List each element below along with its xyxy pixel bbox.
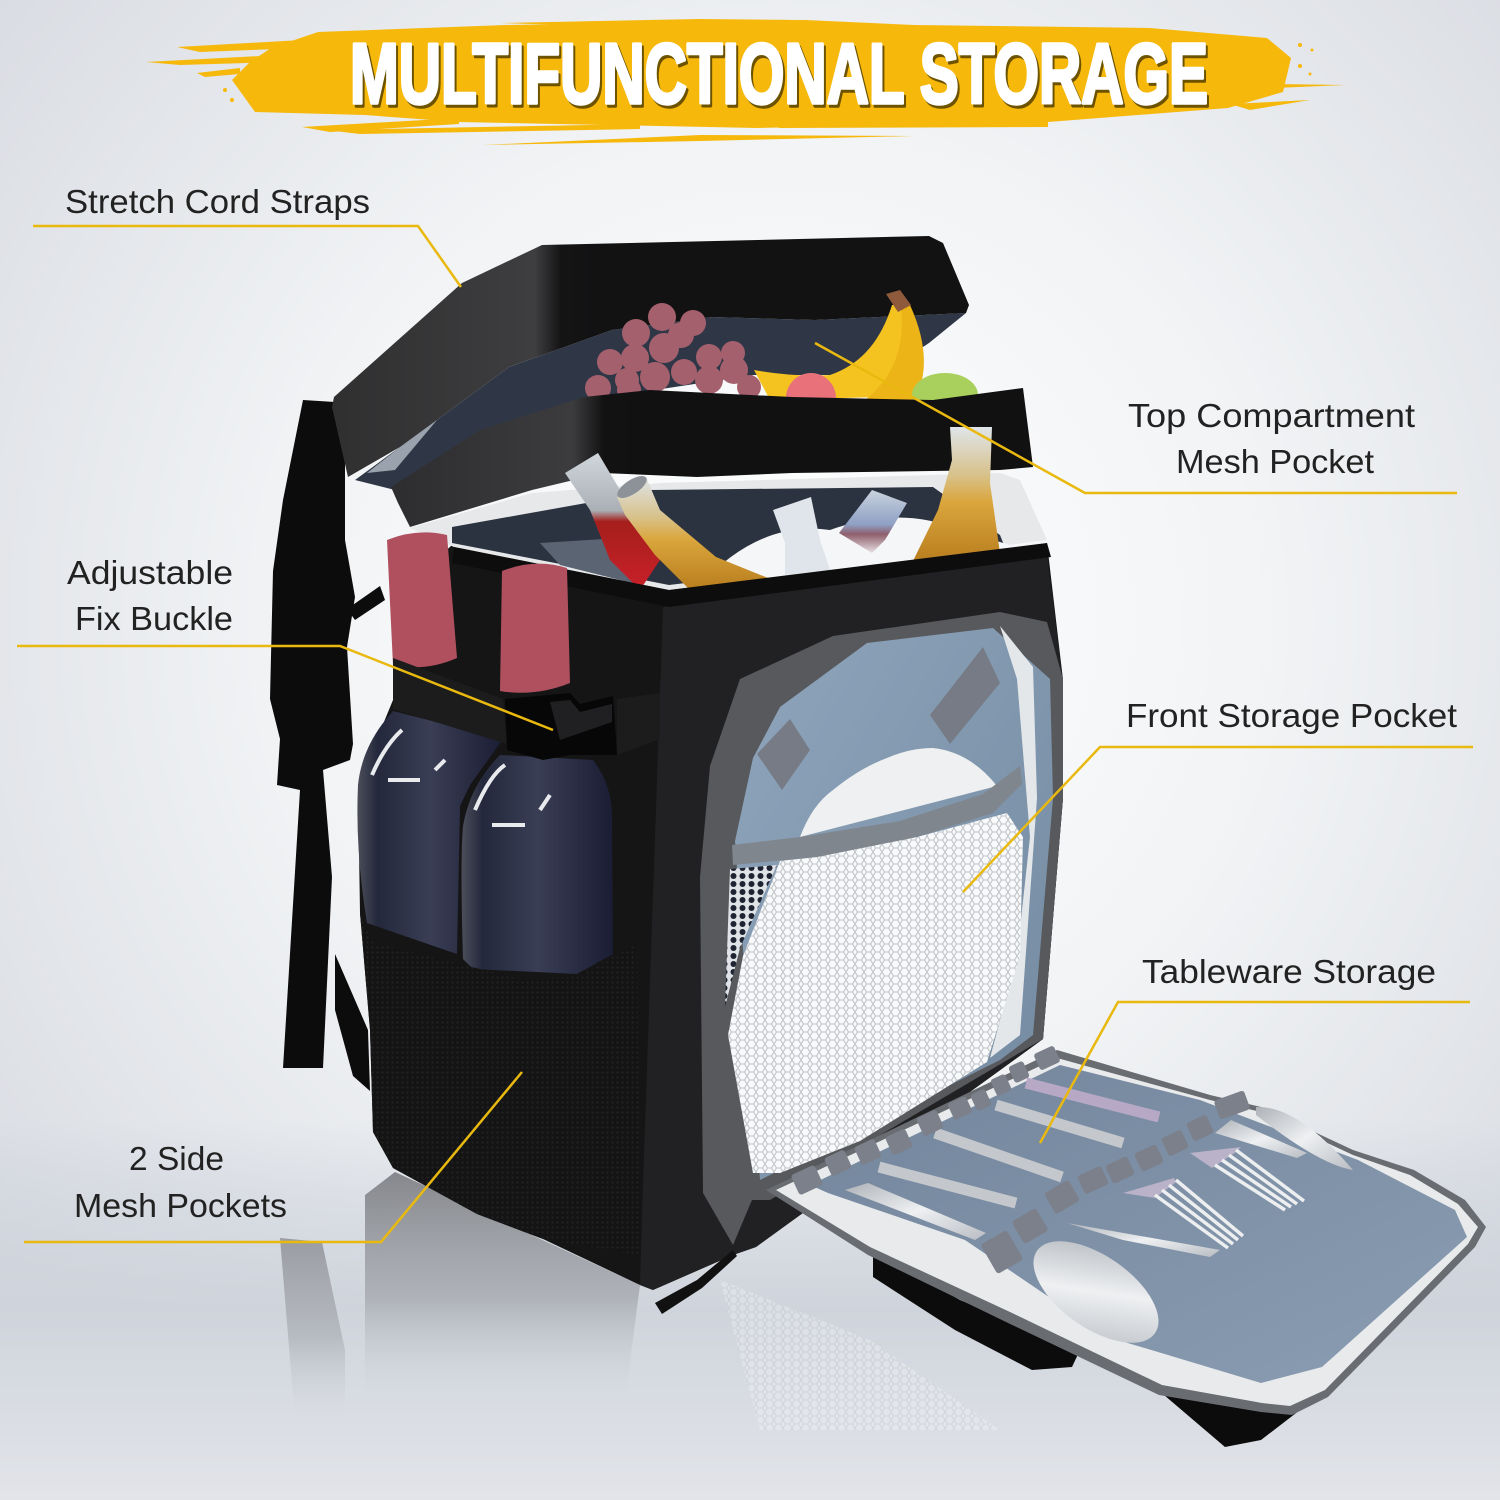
flap inner panel xyxy=(810,1065,1467,1383)
bottle highlights xyxy=(372,730,550,825)
label: 2 side mesh pockets: 2 Side xyxy=(129,1140,224,1177)
main compartment interior xyxy=(410,473,1047,590)
wine bottle glass xyxy=(357,711,613,974)
middle handles xyxy=(879,1083,1159,1203)
red bottle xyxy=(565,453,660,590)
label: top compartment mesh pocket xyxy=(815,343,1457,493)
front spoon xyxy=(1016,1221,1176,1363)
amber bottle left xyxy=(614,472,773,590)
title banner xyxy=(146,19,1345,145)
pocket zipper tape xyxy=(990,626,1037,1058)
dark mesh corner xyxy=(725,865,777,1007)
front knife xyxy=(845,1183,1220,1257)
wine capsules xyxy=(387,532,570,693)
label: front storage pocket xyxy=(963,697,1473,892)
rear spoon xyxy=(1256,1107,1353,1170)
pink bottle xyxy=(839,490,907,553)
label: top compartment mesh pocket: Top Compartment xyxy=(1128,397,1415,434)
rear knife xyxy=(1215,1120,1307,1158)
label: adjustable fix buckle: Adjustable xyxy=(67,554,233,591)
flap rim xyxy=(766,1050,1486,1415)
label: stretch cord straps xyxy=(33,183,461,287)
label: adjustable fix buckle: Fix Buckle xyxy=(75,600,233,637)
flap underside xyxy=(873,1250,1300,1447)
label: tableware storage xyxy=(1040,953,1470,1143)
ice xyxy=(700,518,1047,590)
backpack xyxy=(270,236,1486,1447)
label: tableware storage: Tableware Storage xyxy=(1142,953,1436,990)
beer bottles xyxy=(565,427,1000,590)
upper lid xyxy=(332,236,969,477)
clear bottle middle xyxy=(773,497,830,575)
plate xyxy=(800,748,997,837)
shoulder straps xyxy=(270,400,385,1091)
main compartment rim xyxy=(452,543,1051,607)
label: top compartment mesh pocket: Mesh Pocket xyxy=(1176,443,1374,480)
fruit xyxy=(585,290,978,423)
apples xyxy=(786,373,978,423)
upper lid underside xyxy=(355,313,966,490)
floor reflection xyxy=(280,1172,1000,1430)
label: 2 side mesh pockets: Mesh Pockets xyxy=(74,1187,287,1224)
fork one xyxy=(1123,1178,1243,1248)
label: adjustable fix buckle xyxy=(17,554,553,730)
mesh pocket trim xyxy=(732,766,1022,865)
bananas xyxy=(754,290,924,400)
zipper pull xyxy=(655,1250,737,1314)
grapes xyxy=(585,303,761,402)
adjustable strap xyxy=(393,658,660,755)
amber bottle right xyxy=(912,427,1000,563)
middle lid xyxy=(391,388,1033,527)
yellow brush stroke xyxy=(146,19,1345,145)
front pocket lining xyxy=(735,628,1053,1180)
side mesh pocket xyxy=(360,913,640,1255)
buckle xyxy=(505,693,617,760)
label: stretch cord straps: Stretch Cord Straps xyxy=(65,183,370,220)
front pocket frame xyxy=(700,612,1063,1245)
lid silver lining xyxy=(367,420,437,473)
flap white edge xyxy=(776,1058,1478,1406)
cutlery xyxy=(845,1083,1353,1363)
mesh pocket xyxy=(728,813,1023,1173)
fork two xyxy=(1190,1147,1304,1210)
main body xyxy=(358,543,1063,1290)
pocket tabs xyxy=(757,647,1000,790)
cutlery loops xyxy=(791,1045,1250,1274)
front panel xyxy=(640,555,1063,1290)
label: front storage pocket: Front Storage Pocket xyxy=(1126,697,1457,734)
label: 2 side mesh pockets xyxy=(24,1072,522,1242)
